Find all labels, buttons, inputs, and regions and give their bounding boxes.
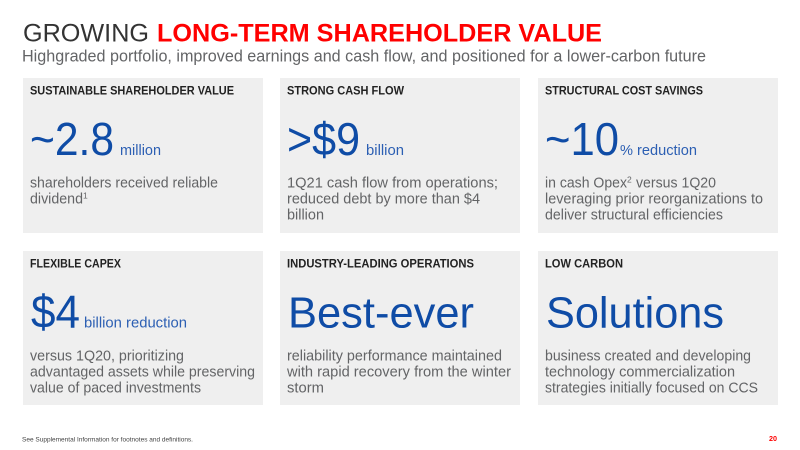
body text: business created and developing bbox=[545, 349, 751, 365]
panel: low carbon bbox=[538, 251, 778, 405]
body text: reliability performance maintained bbox=[287, 349, 502, 365]
big number: >$9 bbox=[287, 113, 360, 165]
body text: versus 1Q20 bbox=[636, 176, 716, 192]
body text bbox=[30, 176, 218, 208]
body text: in cash Opex bbox=[545, 176, 628, 192]
panel: sustainable shareholder value bbox=[23, 78, 263, 233]
page number: 20 bbox=[769, 436, 777, 443]
panel: strong cash flow bbox=[280, 78, 520, 233]
panel heading: INDUSTRY-LEADING OPERATIONS bbox=[287, 258, 474, 270]
body text: reduced debt by more than $4 bbox=[287, 192, 480, 208]
body text bbox=[286, 349, 511, 397]
body text: 2 bbox=[627, 174, 632, 184]
big word: Best-ever bbox=[288, 288, 474, 338]
big word: Solutions bbox=[546, 288, 724, 338]
body text: dividend bbox=[30, 192, 83, 208]
panel heading: STRONG CASH FLOW bbox=[287, 86, 404, 98]
body text: deliver structural efficiencies bbox=[545, 208, 723, 224]
panel heading: LOW CARBON bbox=[545, 258, 623, 270]
body text: versus 1Q20, prioritizing bbox=[30, 349, 184, 365]
unit: million bbox=[120, 142, 161, 159]
body text bbox=[545, 174, 763, 224]
panel: structural cost savings bbox=[538, 78, 778, 233]
body text: advantaged assets while preserving bbox=[30, 365, 255, 381]
body text: technology commercialization bbox=[545, 365, 735, 381]
body text: 1Q21 cash flow from operations; bbox=[287, 176, 498, 192]
body text bbox=[30, 349, 255, 397]
body text: value of paced investments bbox=[30, 381, 201, 397]
unit: % reduction bbox=[620, 142, 697, 159]
body text: with rapid recovery from the winter bbox=[286, 365, 511, 381]
panel: industry-leading operations bbox=[280, 251, 520, 405]
subtitle: Highgraded portfolio, improved earnings and cash flow, and positioned for a lower-carbon future bbox=[22, 48, 706, 66]
body text: 1 bbox=[83, 190, 88, 200]
title: LONG-TERM SHAREHOLDER VALUE bbox=[157, 20, 602, 48]
body text: leveraging prior reorganizations to bbox=[545, 192, 763, 208]
body text: strategies initially focused on CCS bbox=[545, 381, 758, 397]
big number: ~10 bbox=[545, 113, 619, 165]
panel heading: SUSTAINABLE SHAREHOLDER VALUE bbox=[30, 86, 234, 98]
big number: ~2.8 bbox=[30, 113, 114, 165]
body text bbox=[545, 349, 758, 397]
footnote: See Supplemental Information for footnotes and definitions. bbox=[22, 436, 193, 444]
body text bbox=[287, 176, 498, 224]
panel: flexible capex bbox=[23, 251, 263, 405]
body text: billion bbox=[287, 208, 324, 224]
big number: $4 bbox=[31, 286, 80, 338]
body text: storm bbox=[287, 381, 324, 397]
title: GROWING bbox=[23, 20, 149, 48]
unit: billion bbox=[366, 142, 404, 159]
panel heading: STRUCTURAL COST SAVINGS bbox=[545, 86, 703, 98]
unit: billion reduction bbox=[84, 314, 187, 332]
panel heading: FLEXIBLE CAPEX bbox=[30, 258, 121, 270]
body text: shareholders received reliable bbox=[30, 176, 218, 192]
